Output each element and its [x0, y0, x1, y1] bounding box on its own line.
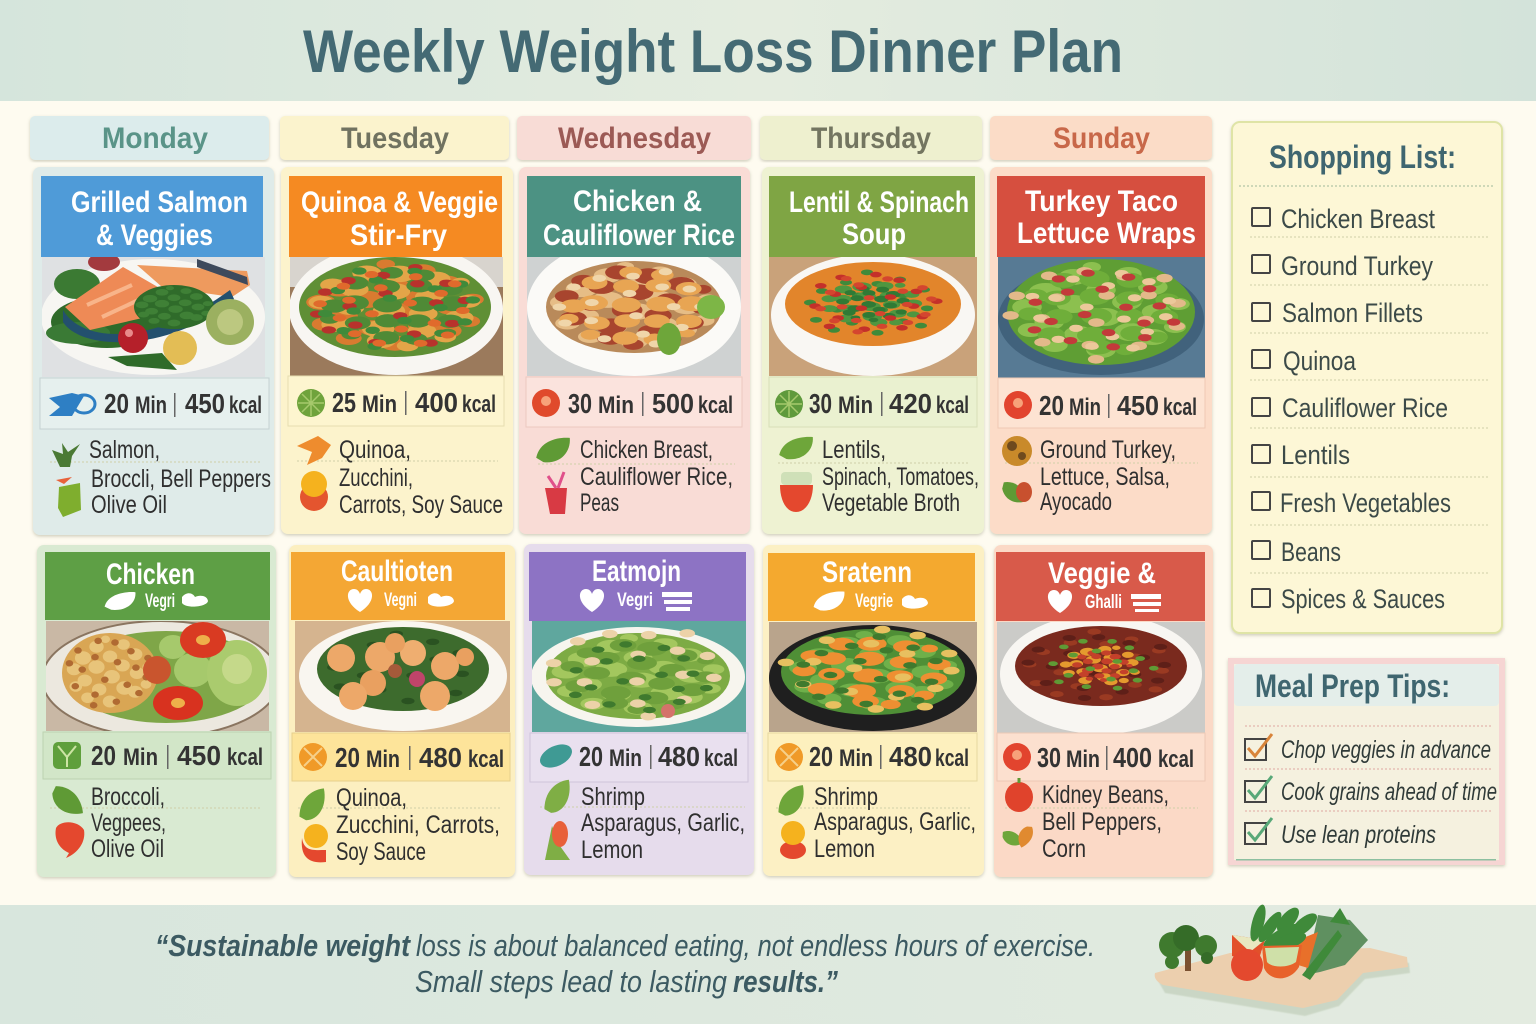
shopping items: Cauliflower Rice — [1282, 393, 1448, 423]
icon: leaf — [296, 788, 328, 822]
icon: orange slice — [299, 743, 327, 771]
ingredients — [50, 436, 271, 519]
stats bar: 450 — [1117, 390, 1159, 421]
title banner: Ghalli — [1085, 592, 1122, 613]
food photo: bean chili bowl — [997, 622, 1205, 732]
stats bar: 480 — [889, 741, 932, 772]
title banner: Vegrie — [855, 591, 893, 612]
ingredients: Kidney Beans, — [1042, 781, 1169, 809]
icon: squash slices — [300, 471, 328, 511]
stats bar: Min — [362, 391, 397, 418]
tab: Wednesday — [517, 116, 751, 160]
stats bar: kcal — [227, 744, 263, 771]
motivational quote: results.” — [733, 964, 838, 999]
tab: Thursday — [760, 116, 982, 160]
card: Lentil and Spinach Soup — [762, 167, 984, 534]
title banner: Eatmojn — [592, 555, 681, 588]
stats bar: kcal — [698, 392, 733, 419]
title banner: Soup — [842, 218, 906, 251]
title banner — [529, 552, 746, 621]
shopping items: Lentils — [1281, 440, 1350, 470]
tab: Sunday: Sunday — [1053, 122, 1150, 155]
motivational quote: “Sustainable weight — [155, 928, 411, 963]
ingredients: Zucchini, — [339, 464, 413, 492]
tab: Sunday — [990, 116, 1212, 160]
stats bar: 420 — [889, 388, 932, 419]
title banner: Lentil & Spinach — [789, 186, 969, 219]
shopping items: Spices & Sauces — [1281, 584, 1445, 614]
title banner: Caultioten — [341, 555, 453, 588]
ingredients: Ground Turkey, — [1040, 436, 1176, 464]
tab: Monday: Monday — [102, 122, 208, 155]
heading: meal prep tips: Meal Prep Tips: — [1255, 668, 1450, 704]
title banner: Lettuce Wraps — [1017, 217, 1196, 250]
stats bar — [530, 733, 748, 782]
stats bar — [288, 376, 504, 426]
stats bar: 20 — [335, 742, 360, 773]
icon: ground turkey — [1002, 436, 1032, 466]
food photo: salmon plate — [42, 257, 265, 377]
food photo: skillet vegetables — [769, 622, 977, 732]
shopping items — [1250, 204, 1488, 614]
title banner: Turkey Taco — [1025, 185, 1178, 218]
tab: Tuesday — [280, 116, 509, 160]
motivational quote: loss is about balanced eating, not endless hours of exercise. — [416, 928, 1095, 963]
title banner — [769, 176, 975, 257]
icon: red pepper — [56, 822, 84, 858]
icon: green sprout tile — [53, 742, 81, 769]
heading: shopping list: Shopping List: — [1269, 139, 1456, 175]
tip: chop veggies — [1245, 734, 1491, 764]
day tabs — [30, 116, 1212, 160]
ingredients: Bell Peppers, — [1042, 808, 1162, 836]
header band — [0, 0, 1536, 101]
title banner: Veggie & — [1048, 557, 1156, 590]
card background — [37, 545, 276, 877]
stats bar: Min — [1066, 746, 1100, 773]
parsley tree — [1159, 925, 1217, 971]
stats bar: kcal — [935, 745, 969, 772]
ingredients — [50, 783, 262, 863]
illustration: cutting board with vegetables — [1155, 903, 1410, 1016]
stats bar: Min — [123, 744, 158, 771]
ingredients: Olive Oil — [91, 835, 164, 863]
icon: herb — [52, 443, 80, 467]
stats bar: 30 — [1037, 742, 1061, 773]
tip: cook grains — [1245, 776, 1497, 806]
motivational quote: Small steps lead to lasting — [415, 964, 727, 999]
ingredients: Spinach, Tomatoes, — [822, 463, 979, 491]
stats bar: 30 — [809, 388, 832, 419]
stats bar: kcal — [704, 745, 738, 772]
title banner — [289, 176, 502, 257]
stats bar: 480 — [658, 741, 700, 772]
shopping items: Beans — [1281, 537, 1341, 567]
title banner: Vegni — [384, 590, 417, 611]
icon: green leaf — [541, 780, 573, 815]
ingredients: Shrimp — [814, 783, 878, 811]
title banner: Grilled Salmon — [71, 186, 248, 219]
icon: lemon and tomato — [780, 821, 806, 859]
icon: tomato — [1004, 391, 1032, 419]
ingredients — [296, 784, 502, 866]
ingredients: Broccoli, — [91, 783, 165, 811]
stats bar — [769, 377, 977, 427]
ingredients: Lemon — [814, 835, 875, 863]
stats bar: Min — [838, 392, 873, 419]
stats bar — [40, 378, 269, 429]
card background — [994, 545, 1213, 877]
panel: shopping list — [1232, 122, 1502, 633]
icon: carrot — [297, 436, 331, 465]
stats bar: 450 — [177, 740, 221, 771]
title banner: Vegri — [617, 590, 653, 611]
stats bar — [998, 378, 1205, 428]
food photo: stir-fry bowl — [290, 257, 503, 376]
panel: meal prep tips — [1228, 658, 1505, 865]
title banner — [527, 176, 741, 257]
title banner: Sratenn — [822, 556, 912, 589]
icon: leaf — [536, 438, 570, 462]
stats bar: 20 — [91, 740, 116, 771]
ingredients: Cauliflower Rice, — [580, 463, 733, 491]
tab: Monday — [30, 116, 269, 160]
shopping items: Ground Turkey — [1281, 251, 1433, 281]
ingredients: Quinoa, — [336, 784, 407, 812]
food photo: taco lettuce plate — [998, 257, 1205, 378]
icon: avocado pepper — [1000, 477, 1032, 507]
ingredients: Corn — [1042, 835, 1086, 863]
icon: squash slices — [302, 824, 328, 862]
ingredients: Shrimp — [581, 783, 645, 811]
title banner: Quinoa & Veggie — [301, 186, 498, 219]
motivational quote — [155, 928, 1095, 999]
icon: teal leaf — [536, 740, 576, 772]
stats bar — [526, 377, 742, 427]
stats bar: 20 — [579, 741, 603, 772]
icon: radish and stalk — [545, 472, 567, 514]
icon: red pepper — [1005, 778, 1033, 812]
ingredients: Peas — [580, 489, 619, 517]
icon: lime — [297, 389, 325, 417]
stats bar: Min — [598, 392, 634, 419]
icon: tomato bowl — [780, 472, 813, 512]
icon: tomato — [532, 389, 560, 417]
card background — [33, 167, 274, 535]
bell pepper cups — [1231, 932, 1318, 981]
card background — [990, 167, 1212, 534]
ingredients: Vegetable Broth — [822, 489, 960, 517]
title banner — [45, 552, 270, 620]
stats bar: Min — [135, 392, 167, 419]
card: Turkey Taco Lettuce Wraps — [972, 167, 1228, 534]
stats bar: Min — [1069, 394, 1101, 421]
icon: fish — [49, 393, 95, 416]
stats bar: 20 — [104, 388, 129, 419]
ingredients: Chicken Breast, — [580, 436, 713, 464]
icon: lime — [775, 390, 803, 418]
icon: oil bottle — [56, 477, 81, 517]
card background — [281, 167, 513, 534]
title banner: Cauliflower Rice — [543, 219, 735, 252]
card background — [762, 167, 984, 534]
ingredients: Lentils, — [822, 436, 886, 464]
stats bar — [768, 733, 977, 781]
card: Caultioten Vegni — [289, 545, 515, 877]
ingredients: Carrots, Soy Sauce — [339, 491, 503, 519]
card: Sratenn Vegrie — [757, 545, 1003, 876]
stats bar: 400 — [415, 387, 458, 418]
card: Veggie and Ghalli — [994, 545, 1213, 877]
ingredients: Olive Oil — [91, 491, 167, 519]
ingredients: Lemon — [581, 836, 643, 864]
pepper cup front — [1262, 945, 1302, 978]
stats bar — [43, 732, 271, 779]
ingredients — [1000, 778, 1198, 863]
card: Chicken and Cauliflower Rice — [519, 167, 750, 534]
green beans — [1247, 903, 1321, 953]
card background — [289, 545, 515, 877]
ingredients — [536, 436, 735, 517]
stats bar: 20 — [1039, 390, 1064, 421]
stats bar: 30 — [568, 388, 592, 419]
stats bar: kcal — [229, 392, 262, 419]
icon: asparagus and lemon — [545, 821, 570, 860]
title banner — [996, 552, 1205, 621]
card: Eatmojn Vegri — [514, 544, 758, 875]
title banner: Chicken & — [573, 185, 702, 218]
stats bar — [292, 733, 510, 781]
ingredients — [778, 436, 979, 517]
card background — [524, 544, 754, 875]
food photo: chicken bowl — [527, 257, 741, 376]
ingredients: Quinoa, — [339, 436, 411, 464]
shopping items: Chicken Breast — [1281, 204, 1435, 234]
ingredients: Lettuce, Salsa, — [1040, 463, 1170, 491]
icon: broccoli leaf — [51, 783, 83, 817]
title banner — [41, 176, 263, 257]
title: Weekly Weight Loss Dinner Plan — [303, 18, 1123, 85]
tab: Thursday: Thursday — [811, 122, 931, 155]
title banner — [997, 176, 1205, 257]
ingredients: Broccli, Bell Peppers — [91, 465, 271, 493]
title banner: Vegri — [145, 591, 175, 612]
icon: corn leaves — [1000, 824, 1038, 850]
ingredients — [1000, 436, 1198, 516]
stats bar: kcal — [462, 391, 496, 418]
stats bar — [997, 733, 1205, 781]
title banner: & Veggies — [96, 219, 213, 252]
card background — [763, 545, 984, 876]
card: Chicken Vegri — [37, 545, 280, 877]
stats bar: kcal — [1158, 746, 1194, 773]
shopping items: Quinoa — [1283, 346, 1357, 376]
stats bar: Min — [366, 746, 400, 773]
stats bar: kcal — [468, 746, 504, 773]
title banner: Stir-Fry — [350, 219, 447, 252]
ingredients: Asparagus, Garlic, — [814, 808, 976, 836]
stats bar: kcal — [936, 392, 969, 419]
ingredients — [540, 780, 745, 864]
stats bar: Min — [609, 745, 642, 772]
icon: orange slice — [775, 743, 803, 771]
ingredients: Asparagus, Garlic, — [581, 809, 745, 837]
ingredients — [297, 436, 503, 519]
tip: lean proteins — [1245, 818, 1436, 849]
food photo: shrimp salad — [532, 621, 746, 732]
tab: Tuesday: Tuesday — [341, 122, 449, 155]
stats bar: 20 — [809, 741, 833, 772]
stats bar: 480 — [419, 742, 462, 773]
stats bar: 400 — [1113, 742, 1152, 773]
food photo: lentil soup — [769, 257, 977, 376]
ingredients — [775, 783, 976, 863]
icon: green leaf — [775, 785, 807, 817]
shopping items: Fresh Vegetables — [1280, 488, 1451, 518]
title banner — [291, 552, 505, 620]
food photo: greens bowl — [295, 621, 510, 732]
shopping items: Salmon Fillets — [1282, 298, 1423, 328]
title banner — [768, 553, 975, 621]
icon: spinach leaf — [779, 437, 813, 459]
card: Quinoa and Veggie Stir-Fry — [280, 167, 516, 534]
ingredients: Salmon, — [89, 436, 160, 464]
stats bar: 450 — [185, 388, 225, 419]
stats bar: Min — [839, 745, 873, 772]
stats bar: 25 — [332, 387, 356, 418]
card background — [519, 167, 750, 534]
herb bunch — [1302, 908, 1368, 980]
food photo: chicken and salad plate — [46, 621, 269, 731]
card: Grilled Salmon and Veggies — [33, 167, 274, 535]
ingredients: Soy Sauce — [336, 838, 426, 866]
stats bar: kcal — [1163, 394, 1197, 421]
ingredients: Ayocado — [1040, 488, 1112, 516]
title banner: Chicken — [106, 558, 195, 591]
tab: Wednesday: Wednesday — [558, 122, 711, 155]
footer band — [0, 905, 1536, 1024]
stats bar: 500 — [652, 388, 694, 419]
icon: tomato — [1003, 743, 1031, 771]
ingredients: Vegpees, — [91, 809, 166, 837]
tip: lean proteins: Use lean proteins — [1281, 821, 1436, 849]
ingredients: Zucchini, Carrots, — [336, 811, 500, 839]
